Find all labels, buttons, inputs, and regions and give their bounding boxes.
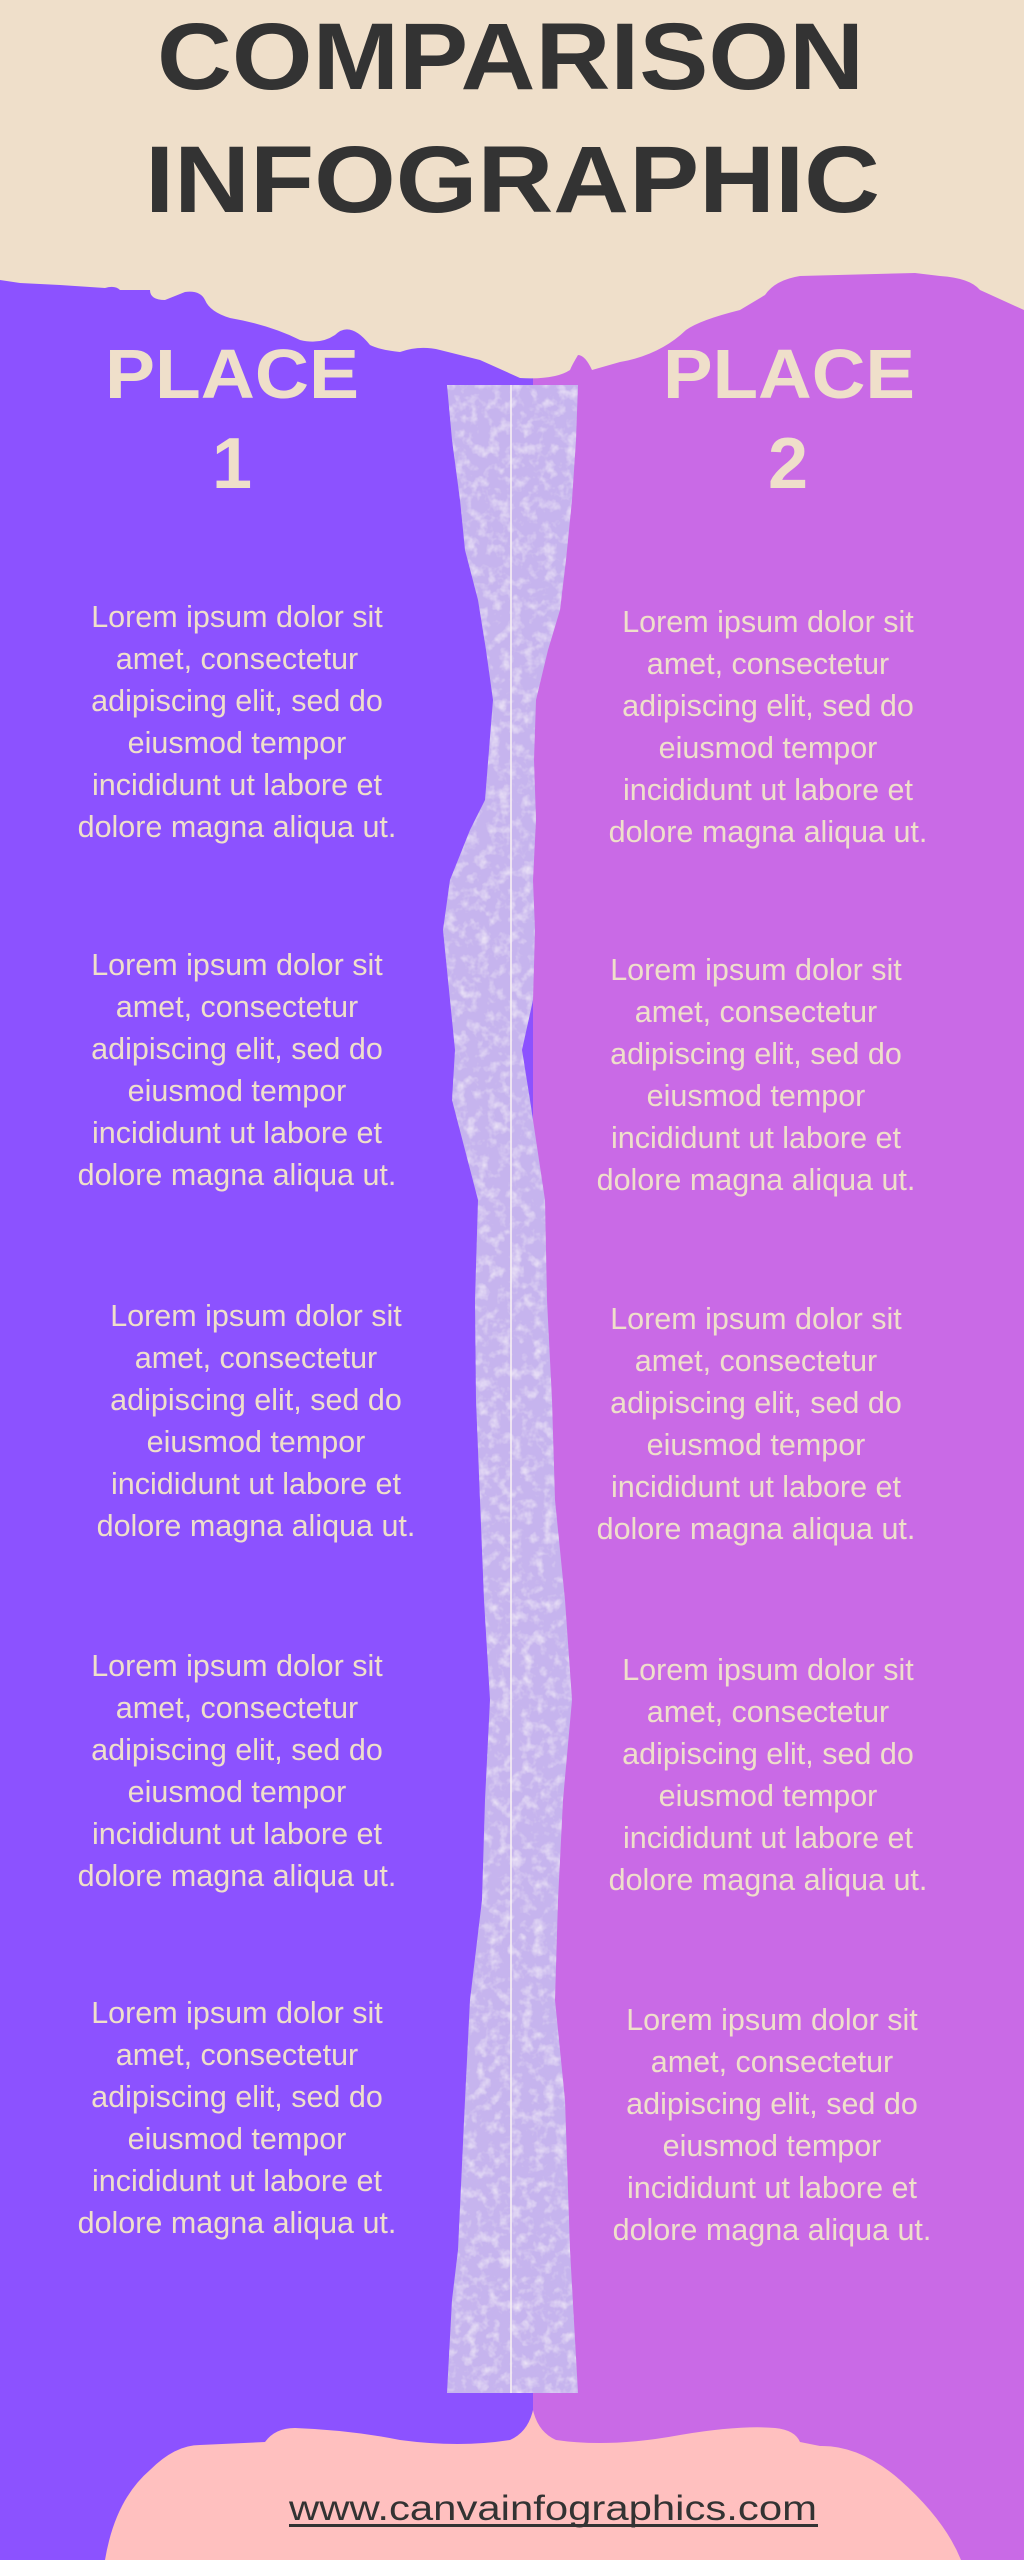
text block: place 1 item 1: Lorem ipsum dolor sit [91, 600, 383, 634]
text block: place 1 item 3: incididunt ut labore et [111, 1467, 401, 1501]
text block: place 1 item 1: adipiscing elit, sed do [91, 684, 383, 718]
text block: place 1 item 2: Lorem ipsum dolor sit [91, 948, 383, 982]
text block: place 1 item 3: Lorem ipsum dolor sit [110, 1299, 402, 1333]
text block: place 1 item 4: Lorem ipsum dolor sit [91, 1649, 383, 1683]
text block: place 2 item 1: Lorem ipsum dolor sit [622, 605, 914, 639]
text block: place 1 item 3: dolore magna aliqua ut. [97, 1509, 415, 1543]
footer url: www.canvainfographics.com [288, 2489, 817, 2528]
text block: place 2 item 1: eiusmod tempor [659, 731, 877, 765]
text block: place 2 item 4: dolore magna aliqua ut. [609, 1863, 927, 1897]
title: INFOGRAPHIC [145, 127, 880, 233]
text block: place 2 item 2: incididunt ut labore et [611, 1121, 901, 1155]
text block: place 2 item 3: incididunt ut labore et [611, 1470, 901, 1504]
text block: place 2 item 2: dolore magna aliqua ut. [597, 1163, 915, 1197]
text block: place 1 item 2: incididunt ut labore et [92, 1116, 382, 1150]
text block: place 2 item 4: eiusmod tempor [659, 1779, 877, 1813]
text block: place 2 item 5: amet, consectetur [651, 2045, 893, 2079]
text block: place 2 item 1: incididunt ut labore et [623, 773, 913, 807]
footer [105, 2410, 961, 2560]
title: COMPARISON [157, 4, 864, 110]
text block: place 2 item 3: dolore magna aliqua ut. [597, 1512, 915, 1546]
text block: place 2 item 2: amet, consectetur [635, 995, 877, 1029]
text block: place 1 item 1: dolore magna aliqua ut. [78, 810, 396, 844]
text block: place 2 item 3: adipiscing elit, sed do [610, 1386, 902, 1420]
text block: place 1 item 5: amet, consectetur [116, 2038, 358, 2072]
text block: place 2 item 5: dolore magna aliqua ut. [613, 2213, 931, 2247]
text block: place 1 item 5: Lorem ipsum dolor sit [91, 1996, 383, 2030]
text block: place 1 item 5: eiusmod tempor [128, 2122, 346, 2156]
text block: place 1 item 5: adipiscing elit, sed do [91, 2080, 383, 2114]
text block: place 2 item 1: adipiscing elit, sed do [622, 689, 914, 723]
title [145, 4, 880, 233]
text block: place 2 item 5: incididunt ut labore et [627, 2171, 917, 2205]
text block: place 2 item 1: dolore magna aliqua ut. [609, 815, 927, 849]
text block: place 2 item 1: amet, consectetur [647, 647, 889, 681]
text block: place 1 item 4: eiusmod tempor [128, 1775, 346, 1809]
text block: place 1 item 1: amet, consectetur [116, 642, 358, 676]
text block: place 2 item 4: Lorem ipsum dolor sit [622, 1653, 914, 1687]
text block: place 1 item 3: amet, consectetur [135, 1341, 377, 1375]
text block: place 2 item 3: Lorem ipsum dolor sit [610, 1302, 902, 1336]
heading: place 1: PLACE [105, 335, 359, 413]
text block: place 1 item 2: dolore magna aliqua ut. [78, 1158, 396, 1192]
text block: place 2 item 4: amet, consectetur [647, 1695, 889, 1729]
header banner [0, 0, 1024, 378]
text block: place 1 item 4: adipiscing elit, sed do [91, 1733, 383, 1767]
heading: place 2: PLACE [663, 335, 915, 413]
text block: place 2 item 3: eiusmod tempor [647, 1428, 865, 1462]
text block: place 2 item 3: amet, consectetur [635, 1344, 877, 1378]
text block: place 1 item 3: adipiscing elit, sed do [110, 1383, 402, 1417]
text block: place 1 item 2: amet, consectetur [116, 990, 358, 1024]
text block: place 1 item 5: dolore magna aliqua ut. [78, 2206, 396, 2240]
text block: place 1 item 1: incididunt ut labore et [92, 768, 382, 802]
text block: place 1 item 4: incididunt ut labore et [92, 1817, 382, 1851]
heading: place 2 [663, 335, 915, 504]
text block: place 1 item 4: dolore magna aliqua ut. [78, 1859, 396, 1893]
heading: place 1 [105, 335, 359, 504]
text block: place 2 item 4: incididunt ut labore et [623, 1821, 913, 1855]
text block: place 2 item 4: adipiscing elit, sed do [622, 1737, 914, 1771]
text block: place 1 item 5: incididunt ut labore et [92, 2164, 382, 2198]
text block: place 1 item 1: eiusmod tempor [128, 726, 346, 760]
heading: place 2: 2 [768, 424, 808, 504]
text block: place 1 item 2: eiusmod tempor [128, 1074, 346, 1108]
text block: place 2 item 2: Lorem ipsum dolor sit [610, 953, 902, 987]
text block: place 2 item 5: adipiscing elit, sed do [626, 2087, 918, 2121]
text block: place 2 item 5: Lorem ipsum dolor sit [626, 2003, 918, 2037]
text block: place 1 item 2: adipiscing elit, sed do [91, 1032, 383, 1066]
text block: place 2 item 2: adipiscing elit, sed do [610, 1037, 902, 1071]
text block: place 2 item 5: eiusmod tempor [663, 2129, 881, 2163]
text block: place 1 item 4: amet, consectetur [116, 1691, 358, 1725]
torn paper divider strip [443, 385, 578, 2393]
panel: place 2 background [533, 0, 1024, 2560]
text block: place 2 item 2: eiusmod tempor [647, 1079, 865, 1113]
heading: place 1: 1 [212, 424, 252, 504]
panel: place 1 background [0, 0, 533, 2560]
text block: place 1 item 3: eiusmod tempor [147, 1425, 365, 1459]
